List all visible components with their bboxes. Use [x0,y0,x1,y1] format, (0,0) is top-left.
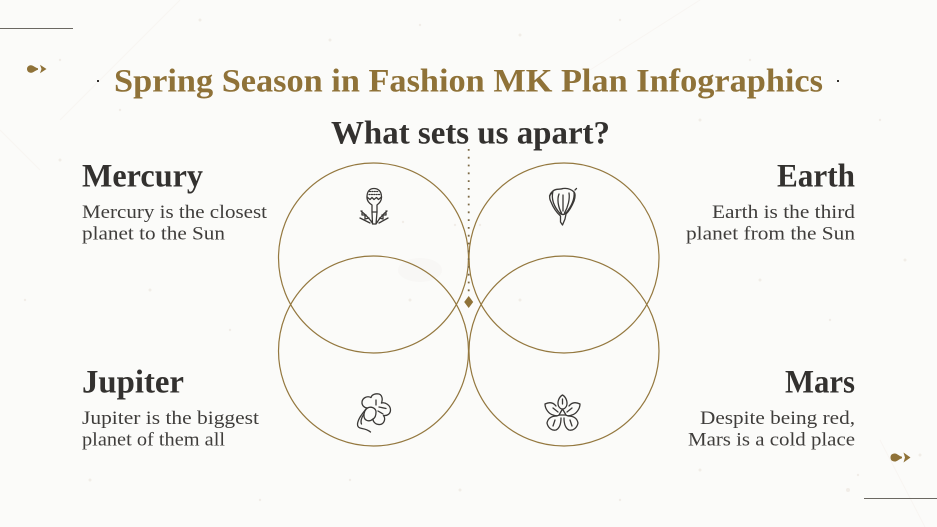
panel: Earth: Earth is the third [712,202,856,223]
ornament: bottom right [890,452,910,462]
subtitle: What sets us apart? [331,116,610,152]
panel: Mercury [82,158,268,244]
panel: Earth: planet from the Sun [686,224,856,244]
panel: Jupiter: planet of them all [82,430,225,450]
panel: Mars: Mars [785,364,855,400]
title: Spring Season in Fashion MK Plan Infographics [114,64,823,100]
panel: Mercury: Mercury is the closest [82,202,268,223]
icon: five-petal blossom [545,395,580,430]
panel: Mercury: Mercury [82,158,203,194]
dotted connector [468,149,470,292]
panel: Jupiter [82,364,260,450]
panel: Mars: Mars is a cold place [688,430,855,450]
diamond [464,296,473,308]
icon: pansy flower [357,394,390,432]
ornament: top left [27,65,46,73]
panel: Earth [686,158,856,244]
icon: thistle flower [360,188,388,224]
venn diagram [278,163,659,446]
panel: Jupiter: Jupiter is the biggest [82,408,260,429]
panel: Mars: Despite being red, [700,408,855,429]
icon: tulip bud [550,188,576,225]
panel: Mercury: planet to the Sun [82,224,226,244]
bottom-right rule [864,498,937,499]
panel: Mars [688,364,855,450]
panel: Jupiter: Jupiter [82,364,184,400]
panel: Earth: Earth [777,158,855,194]
top-left rule [0,28,73,29]
